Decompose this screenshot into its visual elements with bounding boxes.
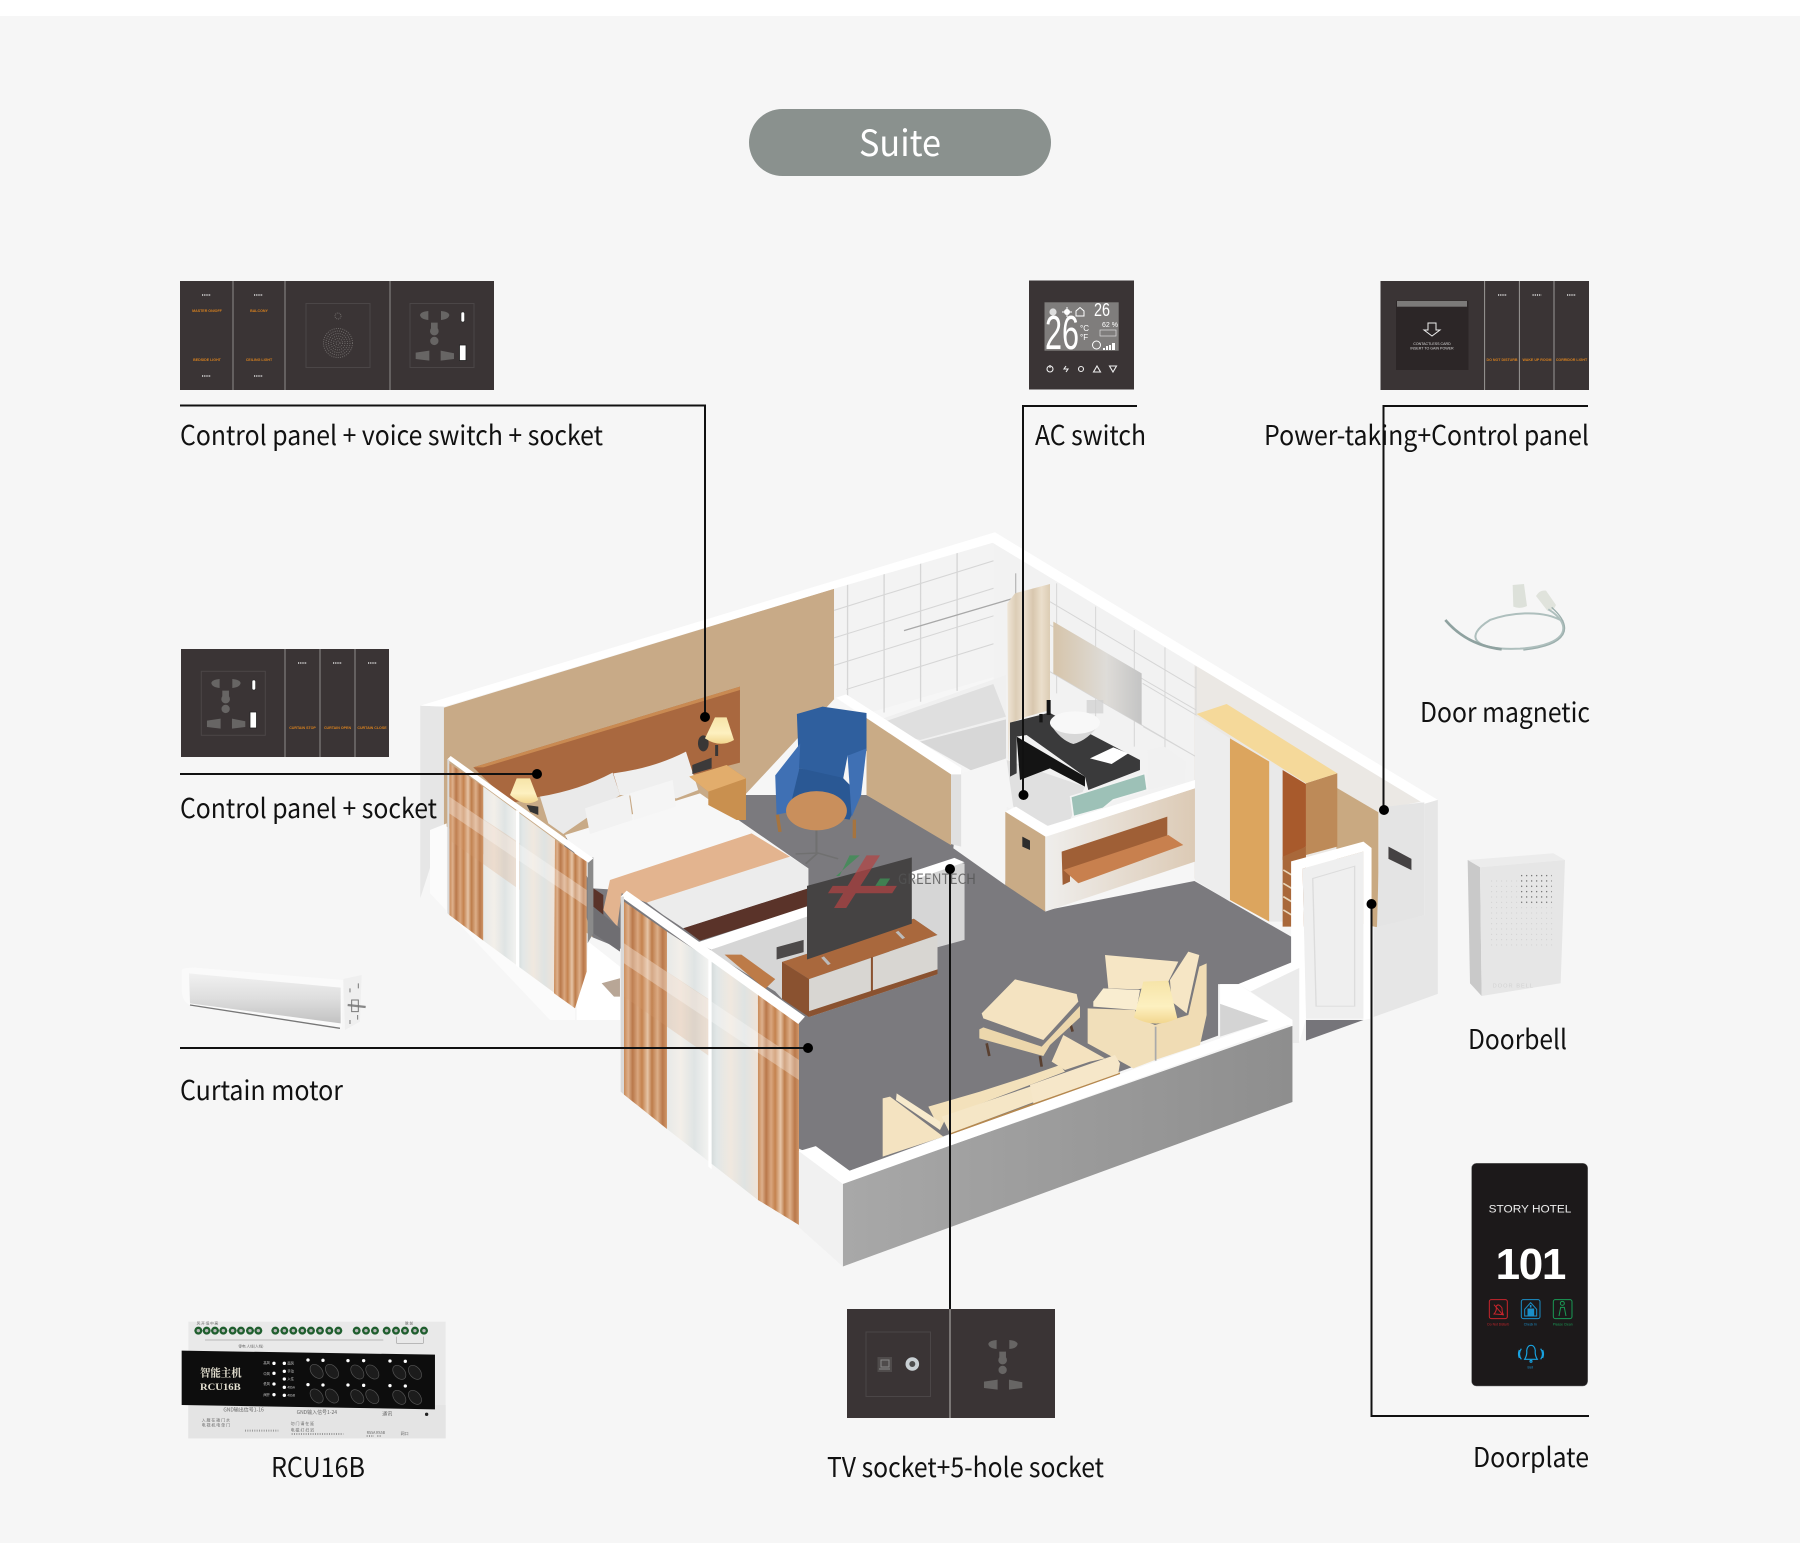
label: TV socket + 5-hole socket: TV socket+5-hole socket [827, 1446, 1104, 1485]
leader line: control panel + socket [180, 769, 542, 779]
product: RCU16B controller: RS5A RS5B [367, 1431, 386, 1436]
product: RCU16B controller: 阀开 [263, 1392, 271, 1397]
top white strip [0, 0, 1800, 16]
product: RCU16B controller: GND输入信号1-24 [297, 1409, 337, 1416]
product: RCU16B controller: 高风 [263, 1360, 271, 1365]
title pill: Suite [749, 109, 1051, 176]
product: RCU16B controller: 风 开 低 中 高 [197, 1321, 219, 1327]
product: control panel + voice switch + socket: CEILING LIGHT [246, 358, 273, 362]
product: RCU16B controller: 电 视 机 电 单 门 [202, 1422, 230, 1429]
partition, TV stand, television [697, 855, 965, 1017]
lounge armchair and lamp [1088, 952, 1207, 1068]
glass screen [1071, 773, 1147, 817]
product: doorbell: DOOR BELL [1493, 983, 1534, 989]
headboard [473, 687, 740, 803]
product: RCU16B controller: 手动 [287, 1369, 295, 1374]
title pill: Suite: Suite [859, 115, 941, 167]
leader line: TV socket [945, 864, 955, 1309]
product: RCU16B controller: 零电 人线(人线) [238, 1343, 264, 1349]
wall behind TV [697, 858, 965, 999]
product: control panel + voice switch + socket: BALCONY [250, 309, 268, 313]
product: RCU16B controller: 电 磁 打 扫 迟 [291, 1427, 314, 1434]
product: door magnetic sensor [1445, 584, 1565, 650]
left curtain wall [447, 756, 593, 1008]
blue armchair [775, 707, 867, 838]
product: RCU16B controller [182, 1321, 446, 1438]
watermark text: GREENTECH [898, 869, 976, 889]
product: doorplate: 101 [1496, 1240, 1566, 1289]
product: RCU16B controller: 低风 [263, 1381, 271, 1386]
curtains [430, 756, 805, 1225]
floor plan: isometric suite [420, 532, 1438, 1266]
right end wall [1374, 800, 1438, 1017]
product: doorplate: Check In [1524, 1322, 1537, 1326]
product: power-taking + control panel: CORRIDOR LIGHT [1556, 358, 1588, 362]
label: curtain motor: Curtain motor [180, 1069, 343, 1108]
vanity [1010, 700, 1140, 790]
product: control panel + socket [181, 649, 389, 757]
product: doorbell [1468, 853, 1565, 996]
product: power-taking + control panel: WAKE UP ROOM [1523, 358, 1551, 362]
product: RCU16B controller: 智能主机 [200, 1365, 242, 1381]
leader line: doorplate [1366, 899, 1589, 1416]
left bedside lamp [510, 778, 538, 815]
product: RCU16B controller: GND输出信号1-16 [223, 1406, 264, 1413]
lounge furniture [883, 952, 1207, 1157]
product: control panel + socket: CURTAIN STOP [289, 726, 316, 730]
sofa [883, 1035, 1120, 1157]
ottoman [979, 979, 1080, 1067]
bathroom: tub, vanity, counter, wardrobe [860, 564, 1337, 927]
product: AC switch: 62 % [1102, 322, 1118, 329]
product: RCU16B controller: 通讯 [382, 1410, 392, 1417]
toilet [1147, 746, 1186, 790]
bed area [473, 687, 808, 941]
product: AC switch: °F [1080, 333, 1088, 342]
product: RCU16B controller: 入 服 在 插 门 水 [202, 1417, 230, 1424]
leader line: control panel + voice switch + socket [180, 406, 710, 722]
bed [540, 752, 808, 941]
label: doorbell: Doorbell [1468, 1018, 1567, 1057]
product: curtain motor [182, 968, 366, 1030]
bathroom floor [953, 758, 1082, 885]
label: doorplate: Doorplate [1473, 1436, 1589, 1475]
TV stand [782, 919, 937, 1017]
product: AC switch: 26 [1094, 300, 1110, 320]
label: control panel + voice switch + socket: Control panel + voice switch + socket [180, 414, 603, 453]
product: doorplate [1472, 1163, 1588, 1386]
product: control panel + voice switch + socket: MASTER ON/OFF [192, 309, 223, 313]
shower curtain [1007, 584, 1050, 767]
product: power-taking + control panel: INSERT TO GAIN POWER [1410, 346, 1454, 350]
door, end wall, partition, blue armchair [775, 694, 1438, 1043]
leader line: curtain motor [180, 1043, 813, 1053]
front curtain wall [621, 891, 805, 1225]
product: control panel + socket: CURTAIN OPEN [324, 726, 351, 730]
product: control panel + socket: CURTAIN CLOSE [357, 726, 387, 730]
product: RCU16B controller: 485A [287, 1384, 295, 1389]
product: power-taking + control panel [1380, 281, 1589, 390]
wall tiles and mirror [1050, 583, 1196, 767]
television [807, 857, 912, 960]
product: RCU16B controller: 网口 [401, 1431, 409, 1437]
leader line: power-taking + control panel [1379, 406, 1588, 815]
entrance door [1291, 842, 1372, 1043]
watermark logo [828, 855, 897, 908]
product: control panel + voice switch + socket [180, 281, 494, 390]
product: RCU16B controller: RCU16B [200, 1383, 241, 1393]
product: AC switch: 26 [1045, 307, 1079, 360]
bathroom partition wall [836, 694, 961, 847]
back walls and floor [420, 532, 1438, 1171]
product: RCU16B controller: 勿 门 请 在 延 [291, 1420, 314, 1427]
product: doorplate: Please Clean [1553, 1322, 1573, 1326]
product: RCU16B controller: 面风 [287, 1361, 295, 1366]
product: doorplate: Bell [1528, 1365, 1533, 1369]
product: control panel + voice switch + socket: BEDSIDE LIGHT [193, 358, 222, 362]
label: control panel + socket: Control panel + socket [180, 787, 437, 826]
counter wall and shelf [1005, 780, 1195, 912]
right nightstand and wall lamp [689, 717, 746, 820]
label: RCU16B: RCU16B [271, 1446, 365, 1485]
product: AC switch: °C [1080, 324, 1089, 333]
front wall [799, 960, 1299, 1266]
product: RCU16B controller: 中风 [263, 1371, 271, 1376]
bathtub [860, 564, 1016, 772]
wardrobe [1195, 704, 1337, 927]
product: power-taking + control panel: DO NOT DISTURB [1487, 358, 1518, 362]
round side table [786, 791, 847, 864]
label: door magnetic: Door magnetic [1420, 691, 1590, 730]
white exterior walls [430, 823, 620, 1020]
label: power-taking + control panel: Power-taking+Control panel [1264, 414, 1589, 453]
product: RCU16B controller: 485B [287, 1392, 296, 1397]
product: doorplate: STORY HOTEL [1489, 1204, 1571, 1216]
product: RCU16B controller: 脉 前 [405, 1321, 413, 1327]
product: AC switch [1029, 280, 1134, 390]
product: doorplate: Do Not Disturb [1487, 1322, 1509, 1326]
product: power-taking + control panel: CONTACTLESS CARD [1413, 342, 1451, 346]
product: TV socket + 5-hole socket [847, 1309, 1055, 1418]
product: RCU16B controller: 入住 [287, 1376, 295, 1381]
label: AC switch: AC switch [1035, 414, 1146, 453]
leader line: AC switch [1018, 406, 1137, 800]
